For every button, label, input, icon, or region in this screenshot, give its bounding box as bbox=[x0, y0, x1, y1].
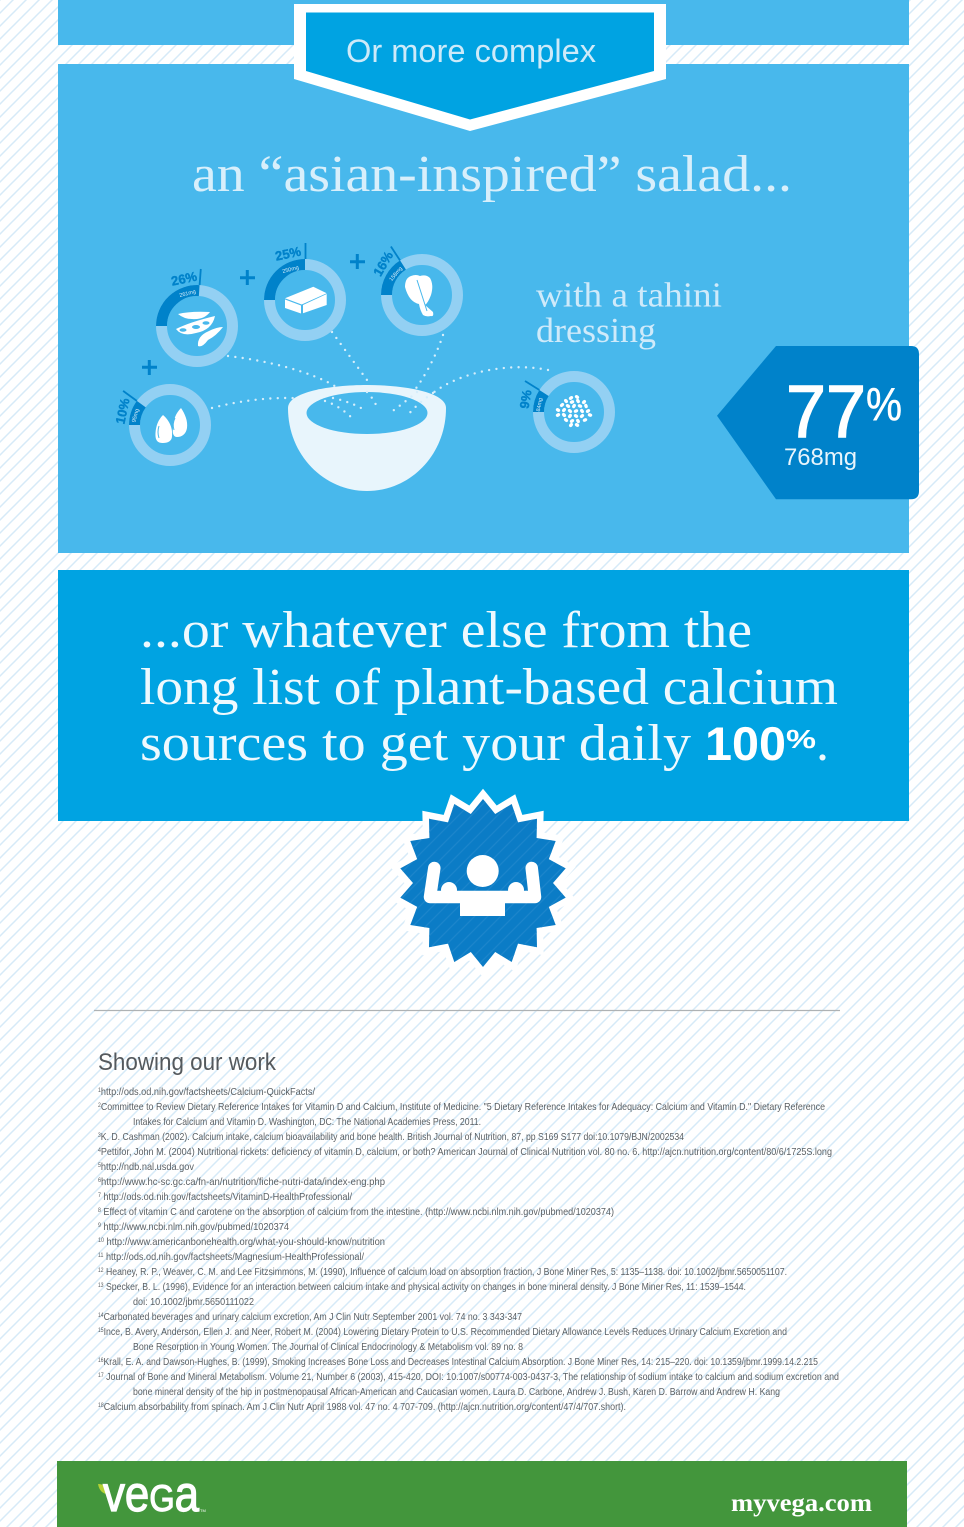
references list: doi: 10.1002/jbmr.5650111022 bbox=[133, 1296, 254, 1308]
references list: http://ods.od.nih.gov/factsheets/Calcium-QuickFacts/ bbox=[101, 1086, 315, 1098]
icon: tofu 25% 250mg bbox=[270, 243, 340, 336]
icon: soybeans 26% 261mg: 261mg bbox=[179, 289, 197, 299]
icon: sesame 9% 84mg: 84mg bbox=[536, 398, 544, 412]
icon: bok choy 16% 158mg: 16% bbox=[370, 248, 396, 279]
icon: soybeans 26% 261mg bbox=[162, 268, 232, 362]
callout: 77% 768mg: 77 bbox=[786, 370, 866, 453]
panel: plant-based calcium sources bbox=[58, 570, 909, 821]
panel: plant-based calcium sources: ...or whatever else from the bbox=[140, 602, 752, 659]
footer bbox=[57, 1461, 907, 1527]
references list: 1 bbox=[98, 1088, 101, 1094]
tahini dressing text: dressing bbox=[536, 311, 656, 350]
plus bbox=[142, 360, 157, 375]
references list: 18 bbox=[98, 1403, 104, 1409]
references list: Calcium absorbability from spinach. Am J Clin Nutr April 1988 vol. 47 no. 4 707-709. (http://ajcn.nutrition.org/content/47/4/707.short). bbox=[104, 1401, 626, 1413]
references list: 2 bbox=[98, 1103, 101, 1109]
references list: http://ods.od.nih.gov/factsheets/Magnesium-HealthProfessional/ bbox=[103, 1251, 364, 1263]
icon: bok choy 16% 158mg bbox=[370, 246, 458, 330]
plus bbox=[240, 270, 255, 285]
references list: Pettifor, John M. (2004) Nutritional rickets: deficiency of vitamin D, calcium, or both? American Journal of Clinical Nutrition vol. 80 no. 6. http://ajcn.nutrition.org/content/80/6/1725S.long bbox=[101, 1146, 832, 1158]
references list: Heaney, R. P., Weaver, C. M. and Lee Fitzsimmons, M. (1990), Influence of calcium load on absorption fraction, J Bone Miner Res, 5: 1135–1138. doi: 10.1002/jbmr.5650051107. bbox=[104, 1266, 787, 1278]
plus bbox=[350, 254, 365, 269]
references list: 15 bbox=[98, 1328, 104, 1334]
references list: 8 bbox=[98, 1208, 101, 1214]
references list: Intakes for Calcium and Vitamin D. Washington, DC: The National Academies Press, 2011. bbox=[133, 1116, 481, 1128]
references list: Effect of vitamin C and carotene on the absorption of calcium from the intestine. (http://www.ncbi.nlm.nih.gov/pubmed/1020374) bbox=[101, 1206, 614, 1218]
references list: http://ods.od.nih.gov/factsheets/VitaminD-HealthProfessional/ bbox=[101, 1191, 352, 1203]
panel: plant-based calcium sources: . bbox=[816, 715, 829, 772]
references list: bone mineral density of the hip in postmenopausal African-American and Caucasian women. Laura D. Carbone, Andrew J. Bush, Karen D. Barrow and Andrew H. Kang bbox=[133, 1386, 780, 1398]
references list: Ince, B. Avery, Anderson, Ellen J. and Neer, Robert M. (2004) Lowering Dietary Protein to U.S. Recommended Dietary Allowance Levels Reduces Urinary Calcium Excretion and bbox=[104, 1326, 787, 1338]
badge: strong person bbox=[400, 799, 566, 967]
banner: or more complex: Or more complex bbox=[346, 33, 596, 69]
icon: sesame 9% 84mg: 9% bbox=[517, 388, 535, 410]
icon: almonds 10% 95mg: 10% bbox=[113, 396, 133, 425]
icon: almonds 10% 95mg bbox=[113, 390, 206, 460]
salad heading: an “asian-inspired” salad... bbox=[192, 146, 792, 203]
references list: http://ndb.nal.usda.gov bbox=[101, 1161, 195, 1173]
callout: 77% 768mg: 768mg bbox=[784, 444, 857, 471]
references list: http://www.ncbi.nlm.nih.gov/pubmed/1020374 bbox=[101, 1221, 289, 1233]
logo: vega: TM bbox=[200, 1508, 206, 1513]
icon: soybeans 26% 261mg: 26% bbox=[170, 268, 199, 289]
references list: http://www.americanbonehealth.org/what-you-should-know/nutrition bbox=[104, 1236, 385, 1248]
panel: plant-based calcium sources: 100 bbox=[705, 717, 786, 770]
bowl bbox=[288, 385, 446, 491]
references list: 3 bbox=[98, 1133, 101, 1139]
references list: Carbonated beverages and urinary calcium excretion, Am J Clin Nutr September 2001 vol. 74 no. 3 343-347 bbox=[104, 1311, 522, 1323]
panel: plant-based calcium sources: sources to get your daily bbox=[140, 715, 691, 772]
references list: 10 bbox=[98, 1238, 105, 1244]
references list: Specker, B. L. (1996), Evidence for an interaction between calcium intake and physical activity on changes in bone mineral density. J Bone Miner Res, 11: 1539–1544. bbox=[104, 1281, 746, 1293]
references list: 12 bbox=[98, 1268, 104, 1274]
icon: tofu 25% 250mg: 250mg bbox=[282, 265, 300, 275]
logo: vega: veGa bbox=[103, 1466, 199, 1522]
panel: plant-based calcium sources: long list of plant-based calcium bbox=[140, 659, 838, 716]
references list: Bone Resorption in Young Women. The Journal of Clinical Endocrinology & Metabolism vol. 89 no. 8 bbox=[133, 1341, 523, 1353]
references list: http://www.hc-sc.gc.ca/fn-an/nutrition/fiche-nutri-data/index-eng.php bbox=[101, 1176, 385, 1188]
references list: 14 bbox=[98, 1313, 104, 1319]
references list: Krall, E. A. and Dawson-Hughes, B. (1999), Smoking Increases Bone Loss and Decreases Intestinal Calcium Absorption. J Bone Miner Res, 14: 215–220. doi: 10.1359/jbmr.1999.14.2.215 bbox=[104, 1356, 818, 1368]
website url: myvega.com bbox=[731, 1490, 872, 1517]
references list: K. D. Cashman (2002). Calcium intake, calcium bioavailability and bone health. British Journal of Nutrition, 87, pp S169 S177 doi:10.1079/BJN/2002534 bbox=[101, 1131, 684, 1143]
references list: 11 bbox=[98, 1253, 104, 1259]
tahini dressing text: with a tahini bbox=[536, 276, 722, 314]
references list: 13 bbox=[98, 1283, 104, 1289]
dotted connectors bbox=[212, 332, 548, 419]
icon: tofu 25% 250mg: 25% bbox=[274, 243, 303, 264]
callout: 77% 768mg: % bbox=[866, 378, 902, 430]
panel: asian-inspired salad bbox=[58, 4, 909, 553]
top band bbox=[58, 0, 909, 45]
references list: 5 bbox=[98, 1163, 102, 1169]
icon: sesame 9% 84mg bbox=[517, 376, 610, 448]
tahini dressing text bbox=[536, 276, 722, 350]
references list: 16 bbox=[98, 1358, 104, 1364]
references list: 9 bbox=[98, 1223, 102, 1229]
references list: Committee to Review Dietary Reference Intakes for Vitamin D and Calcium, Institute of Medicine. "5 Dietary Reference Intakes for Adequacy: Calcium and Vitamin D." Dietary Reference bbox=[101, 1101, 825, 1113]
icon: bok choy 16% 158mg: 158mg bbox=[389, 266, 404, 283]
references list: 4 bbox=[98, 1148, 101, 1154]
references list: Journal of Bone and Mineral Metabolism. Volume 21, Number 6 (2003), 415-420, DOI: 10.1007/s00774-003-0437-3, The relationship of sodium intake to calcium and sodium excretion and bbox=[104, 1371, 839, 1383]
references list: 17 bbox=[98, 1373, 104, 1379]
banner: or more complex bbox=[294, 4, 666, 131]
panel: plant-based calcium sources: % bbox=[786, 724, 816, 754]
icon: almonds 10% 95mg: 95mg bbox=[131, 408, 141, 423]
references list: 6 bbox=[98, 1178, 102, 1184]
heading: showing our work: Showing our work bbox=[98, 1049, 277, 1076]
callout: 77% 768mg bbox=[717, 346, 919, 499]
references list: 7 bbox=[98, 1193, 101, 1199]
references list bbox=[98, 1086, 839, 1413]
